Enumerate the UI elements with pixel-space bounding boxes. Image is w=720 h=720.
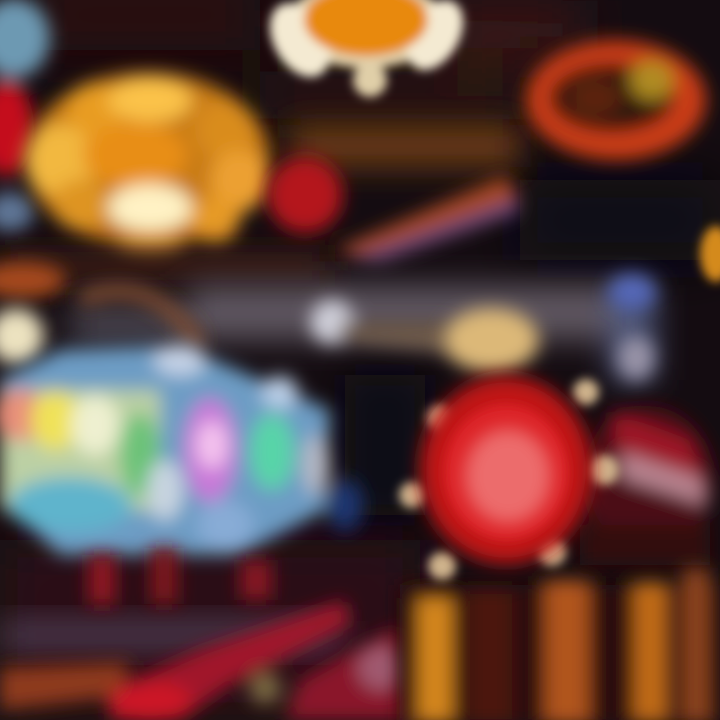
top-left blue and red edge [0, 0, 50, 232]
slot machine screens [0, 344, 363, 555]
chip notches [399, 379, 619, 580]
right dark red chip stack [580, 406, 714, 565]
bottom red carpet sweep [0, 600, 410, 720]
orange chip columns [400, 568, 720, 720]
dark red machine bases [0, 620, 340, 650]
dark column behind chip [345, 375, 425, 515]
chip inner ring [444, 404, 568, 540]
grey middle wall band [70, 285, 655, 380]
chip body [420, 376, 592, 564]
tan lamp above chip [443, 308, 539, 372]
chandelier: large golden light [24, 72, 270, 253]
top-right ring [526, 40, 706, 160]
wall lights [0, 274, 656, 380]
red poker chip [399, 376, 619, 580]
top centre chip [257, 0, 475, 97]
right edge orange light [700, 226, 720, 282]
red panel and streaks beside chandelier [0, 125, 520, 277]
chip centre [464, 428, 552, 524]
